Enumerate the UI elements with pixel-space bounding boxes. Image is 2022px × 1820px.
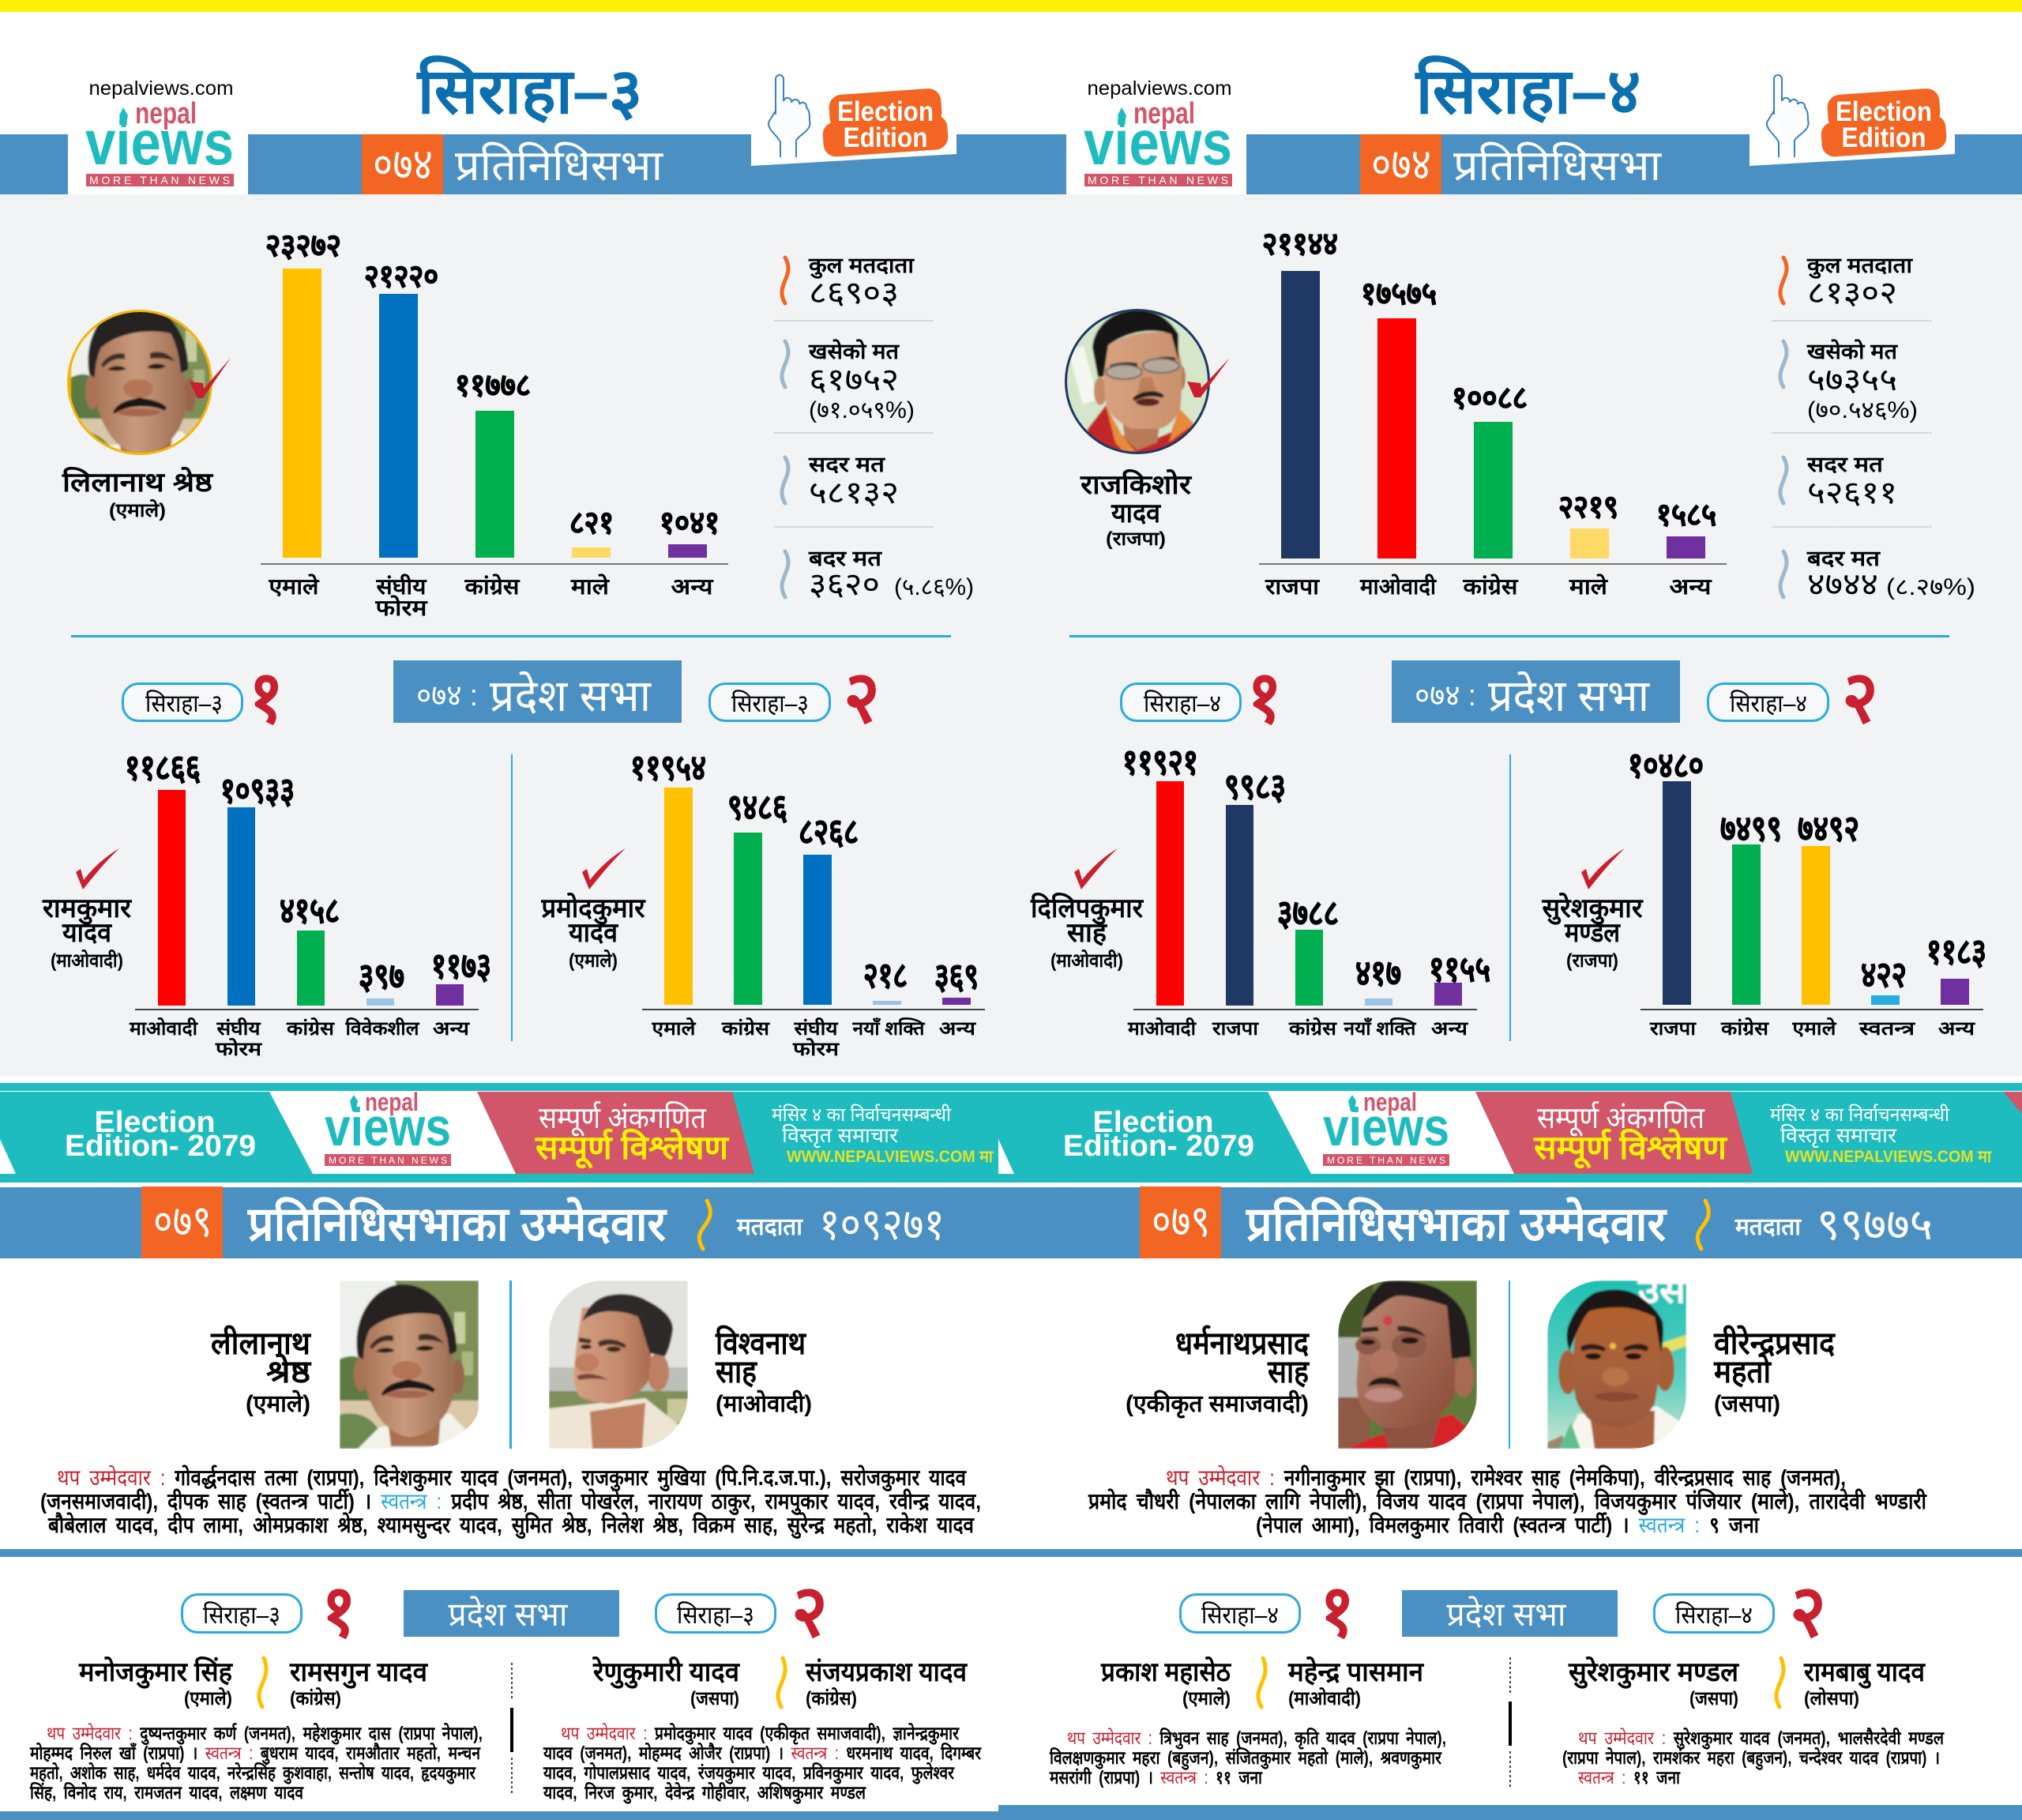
other candidates: province 2: (राप्रपा नेपाल), रामशंकर महरा (बहुजन), चन्देश्वर यादव (राप्रपा) । [1562,1747,1940,1770]
province 1 winner: साह [1066,918,1108,948]
heading band: ०७९ [153,1196,212,1246]
other candidates text: थप उम्मेदवार : गोवर्द्धनदास तत्मा (राप्रपा), दिनेशकुमार यादव (जनमत), राजकुमार मुखिया (पि.नि.द.ज.पा.), सरोजकुमार यादव [57,1465,967,1491]
heading band [1011,1186,2022,1258]
constituency 2 tag: सिराहा–३ [677,1601,754,1629]
bar chart: province 1: अन्य [1431,1018,1468,1040]
banner text: election edition: Election [95,1106,215,1139]
bar chart: province 1: ९९८३ [1224,766,1286,807]
province 2 winner: मण्डल [1564,918,1622,948]
winner name: लिलानाथ श्रेष्ठ [62,466,214,498]
banner text: website: WWW.NEPALVIEWS.COM मा [787,1148,994,1166]
vote statistics: कुल मतदाता [1806,254,1913,279]
candidate name: virendra: (जसपा) [1714,1391,1780,1417]
other candidates text: प्रमोद चौधरी (नेपालका लागि नेपाली), विजय यादव (राप्रपा नेपाल), विजयकुमार पंजियार (माले), तारादेवी भण्डारी [1088,1488,1928,1515]
banner text: election edition: Edition- 2079 [1063,1130,1254,1163]
bar chart: federal: ८२१ [569,506,614,540]
heading: pradesh sabha 074: प्रदेश सभा [490,671,652,720]
bar chart: federal: कांग्रेस [464,573,521,599]
province 1 candidates: रामसगुन यादव [289,1657,428,1689]
check mark [1187,358,1230,397]
other candidates: province 1: थप उम्मेदवार : दुष्यन्तकुमार कर्ण (जनमत), महेशकुमार दास (राप्रपा नेपाल), [47,1722,483,1746]
bar chart: province 1: ४१५८ [280,890,340,931]
banner logo [325,1088,451,1166]
logo: nepal views: MORE THAN NEWS [1088,174,1228,186]
vote statistics: ३६२० [809,567,880,602]
banner text: election edition [65,1106,256,1163]
other candidates text: (नेपाल आमा), विमलकुमार तिवारी (स्वतन्त्र पार्टी) । स्वतन्त्र : ९ जना [1256,1512,1761,1539]
bar chart: federal: १०४१ [660,506,720,540]
vote statistics: खसेको मत [1806,339,1899,363]
bar chart: federal [261,228,728,620]
bar chart: federal [1259,227,1727,599]
vote statistics: बदर मत [1806,547,1881,570]
vote statistics [774,254,974,602]
banner text: complete analysis [1533,1100,1728,1169]
vote statistics: (७०.५४६%) [1807,397,1918,423]
province 2 winner: प्रमोदकुमार [541,892,646,925]
candidate name: virendra: महतो [1713,1353,1772,1389]
election edition card: Edition [844,122,927,153]
banner text: website: मंसिर ४ का निर्वाचनसम्बन्धी [772,1104,952,1126]
banner text: election edition: Edition- 2079 [65,1130,256,1163]
banner text: election edition: Election [1093,1106,1213,1139]
bar chart: province 1: ११७३ [431,946,491,986]
bar chart: province 2: ९४८६ [727,787,787,827]
vote statistics: ६१७५२ [809,363,899,397]
vote statistics: खसेको मत [808,339,900,363]
banner logo: views [1323,1097,1449,1157]
province 2 candidates: (जसपा) [1689,1688,1738,1709]
panel: सिराहा-४ 074 results [1011,55,2022,1041]
constituency 1 tag: सिराहा–४ [1144,690,1221,717]
other candidates text: (जनसमाजवादी), दीपक साह (स्वतन्त्र पार्टी) । स्वतन्त्र : प्रदीप श्रेष्ठ, सीता पोखरेल, नारायण ठाकुर, रामपुकार यादव, रवीन्द्र यादव, [40,1488,981,1515]
bar chart: federal: संघीय [375,573,427,599]
constituency 1 tag [182,1571,356,1652]
winner name [1080,468,1192,550]
banner logo: MORE THAN NEWS [1327,1155,1445,1166]
other candidates: province 1: सिंह, विनोद राय, रामजतन यादव, लक्ष्मण यादव [29,1781,304,1803]
bar chart: federal: माले [1569,573,1608,599]
banner: election edition 2079 (left) [0,1083,2022,1183]
province 1 winner: यादव [62,918,112,948]
candidate name: dharmanath: (एकीकृत समाजवादी) [1126,1389,1309,1419]
bar chart: province 1: कांग्रेस [1288,1017,1337,1040]
logo: nepal views: nepal [1133,97,1195,130]
panel: सिराहा-३ 074 results [0,55,1011,1060]
bar chart: province 1: ३७८८ [1277,893,1339,933]
province 1 winner [42,848,132,972]
province 1 winner [1030,848,1144,972]
province 1 candidates: (एमाले) [1182,1687,1231,1709]
constituency 2 tag: २ [1790,1571,1826,1652]
logo: nepal views [1066,77,1246,194]
panel: province candidates सिराहा-३ [29,1571,982,1804]
province 2 candidates: सुरेशकुमार मण्डल [1568,1656,1740,1689]
logo: nepal views: nepalviews.com [1087,77,1232,100]
bar chart: province 2: ७४९९ [1720,808,1782,848]
winner name: (राजपा) [1106,528,1166,550]
bar chart: province 1: फोरम [215,1038,263,1060]
logo: nepal views: MORE THAN NEWS [89,174,230,186]
vote statistics: (७१.०५९%) [809,397,915,423]
other candidates: province 2: यादव, गोपालप्रसाद यादव, रंजयकुमार यादव, प्रविनकुमार यादव, फुलेश्वर [543,1762,955,1784]
orange year tag: ०७४ [1371,139,1431,189]
band title: प्रतिनिधिसभा [1453,141,1662,190]
bar chart: federal: अन्य [1670,574,1713,599]
bar chart: province 1: ११९२१ [1122,742,1198,782]
province 1 winner: (माओवादी) [1050,949,1123,972]
banner text: election edition [1063,1106,1254,1163]
heading: pradesh sabha 074: ०७४ : [416,679,478,713]
constituency 1 tag: सिराहा–३ [145,690,223,717]
candidate name: lilanath [210,1325,312,1417]
heading band: १०९२७१ [819,1199,945,1249]
heading band: मतदाता [1734,1214,1802,1240]
bar chart: province 2: संघीय [793,1017,839,1040]
candidate name: lilanath: (एमाले) [246,1389,310,1417]
candidate name: dharmanath: धर्मनाथप्रसाद [1175,1325,1310,1361]
constituency 2 tag: सिराहा–३ [731,690,809,717]
other candidates: province 1 [1049,1727,1446,1788]
province 1 winner: (माओवादी) [51,949,123,972]
bar chart: province 1: ३९७ [359,956,404,996]
candidate name: lilanath: श्रेष्ठ [266,1353,312,1389]
other candidates: province 1 [29,1722,483,1803]
bar chart: federal: २१२२० [364,259,438,294]
winner name: राजकिशोर [1080,468,1192,500]
constituency 1 tag: सिराहा–३ [203,1601,280,1629]
constituency 2 tag: सिराहा–४ [1675,1601,1753,1629]
banner text: complete analysis: सम्पूर्ण अंकगणित [1537,1100,1705,1137]
vote statistics: ८६९०३ [809,276,899,310]
bar chart: federal: ११७७८ [455,368,531,403]
bar chart: province 1: राजपा [1212,1018,1259,1040]
bar chart: federal: १७५७५ [1361,276,1437,311]
bar chart: province 1 [1122,742,1490,1040]
bar chart: federal: माओवादी [1359,573,1438,599]
logo: nepal views: nepalviews.com [88,77,234,100]
winner photo [1065,309,1210,458]
bar chart: province 2: २१८ [863,955,908,995]
panel: province candidates सिराहा-४ [1049,1571,1945,1788]
province 2 winner: (राजपा) [1566,950,1618,972]
banner logo: nepal [365,1088,419,1116]
bar chart: province 2: राजपा [1649,1018,1697,1040]
constituency 1 tag: सिराहा–४ [1201,1601,1279,1629]
district title: सिराहा–३ [415,55,643,126]
bar chart: federal: अन्य [671,574,715,599]
bar chart: federal: कांग्रेस [1462,573,1519,599]
vote statistics: ८१३०२ [1807,276,1897,310]
other candidates text [1088,1465,1928,1539]
province 1 candidates: मनोजकुमार सिंह [78,1656,234,1689]
other candidates: province 2: यादव, निरज कुमार, देवेन्द्र गोहीवार, अशिषकुमार मण्डल [543,1781,866,1804]
bar chart: federal: २३२७२ [265,228,341,263]
constituency 2 tag: २ [1842,657,1878,738]
candidate photo: lilanath [340,1280,479,1449]
heading: pradesh sabha: प्रदेश सभा [1447,1596,1567,1633]
logo: nepal views [68,77,248,194]
other candidates: province 2 [1562,1727,1945,1788]
vote statistics: सदर मत [808,453,886,476]
heading: pradesh sabha [404,1590,619,1637]
bar chart: federal: २११४४ [1262,227,1338,261]
bar chart: province 2: नयाँ शक्ति [851,1017,926,1040]
election edition card: Edition [1842,122,1926,153]
vote statistics: (५.८६%) [894,574,974,600]
constituency 2 tag: २ [791,1571,828,1652]
banner text: website: विस्तृत समाचार [1780,1123,1897,1148]
banner text: website: विस्तृत समाचार [782,1123,899,1148]
other candidates: province 2: थप उम्मेदवार : प्रमोदकुमार यादव (एकीकृत समाजवादी), ज्ञानेन्द्रकुमार [561,1722,960,1745]
heading: pradesh sabha: प्रदेश सभा [449,1596,569,1633]
banner logo: MORE THAN NEWS [329,1155,447,1166]
bar chart: province 2: फोरम [792,1038,840,1060]
bar chart: federal: १००८८ [1452,381,1528,416]
heading band: प्रतिनिधिसभाका उम्मेदवार [1246,1197,1667,1250]
province 2 candidates: (लोसपा) [1804,1687,1859,1709]
logo: nepal views: nepal [135,97,197,130]
bar chart: federal: माले [570,573,610,599]
other candidates text: थप उम्मेदवार : नगीनाकुमार झा (राप्रपा), रामेश्वर साह (नेमकिपा), वीरेन्द्रप्रसाद साह (जनमत), [1166,1465,1846,1491]
province 1 candidates: प्रकाश महासेठ [1100,1656,1231,1687]
province 2 candidates: संजयप्रकाश यादव [805,1657,968,1687]
heading band: प्रतिनिधिसभाका उम्मेदवार [247,1197,667,1250]
bar chart: province 1: कांग्रेस [286,1017,335,1040]
bar chart: province 1: माओवादी [1127,1017,1197,1040]
province 2 winner [541,848,646,972]
bar chart: province 2: ११९५४ [630,747,706,788]
vote statistics [1772,254,1975,602]
province 1 winner: रामकुमार [42,893,132,925]
candidate photo: virendra: उस [1637,1272,1688,1310]
bar chart: province 2: एमाले [651,1017,697,1040]
bar chart: province 2: अन्य [939,1018,976,1040]
other candidates: province 2: थप उम्मेदवार : सुरेशकुमार यादव (जनमत), भालसैरदेवी मण्डल [1578,1727,1945,1750]
banner logo: nepal [1363,1088,1417,1116]
province 1 candidates [78,1656,428,1709]
province 2 winner: यादव [568,918,618,948]
bar chart: province 2 [630,747,985,1060]
province 2 candidates [592,1656,968,1709]
constituency 1 tag: १ [249,657,284,738]
province 2 winner: सुरेशकुमार [1542,892,1644,925]
province 2 candidates: (कांग्रेस) [806,1687,857,1709]
panel: 079 candidates सिराहा-३ [0,1186,1011,1539]
vote statistics: (८.२७%) [1886,574,1975,600]
bar chart: federal: राजपा [1265,574,1321,599]
candidate name: dharmanath: साह [1267,1355,1310,1389]
bar chart: federal: १५८५ [1656,498,1716,532]
constituency 2 tag [1708,657,1878,738]
bar chart: province 2: ८२६८ [799,811,859,852]
other candidates: province 2: यादव (जनमत), मोहम्मद ओजैर (राप्रपा) । स्वतन्त्र : धरमनाथ यादव, दिगम्बर [543,1742,982,1763]
bar chart: province 2 [1628,745,1986,1040]
winner name: (एमाले) [109,499,166,521]
other candidates: province 1: थप उम्मेदवार : त्रिभुवन साह (जनमत), कृति यादव (राप्रपा नेपाल), [1067,1727,1446,1750]
other candidates: province 1: विलक्षणकुमार महरा (बहुजन), संजितकुमार महतो (माले), श्रवणकुमार [1049,1747,1442,1770]
province 1 winner: दिलिपकुमार [1030,892,1144,925]
bar chart: federal: फोरम [374,595,428,620]
heading: pradesh sabha 074 [393,660,682,723]
election edition card [1750,75,1955,166]
bar chart: province 2: स्वतन्त्र [1859,1018,1916,1040]
bar chart: province 2: एमाले [1791,1017,1837,1040]
vote statistics: ५७३५५ [1807,363,1897,397]
election edition card [751,75,957,166]
banner text: website [1770,1104,1992,1166]
constituency 1 tag: १ [1247,657,1282,738]
province 2 winner [1542,848,1644,972]
candidate name: bishwanath: विश्वनाथ [715,1325,806,1361]
bar chart: province 2: अन्य [1938,1018,1975,1040]
candidate name: dharmanath [1126,1325,1310,1419]
orange year tag: ०७४ [373,139,433,189]
banner text: complete analysis: सम्पूर्ण अंकगणित [539,1100,707,1137]
candidate name: virendra: वीरेन्द्रप्रसाद [1713,1325,1836,1361]
election edition card: Election [1836,96,1932,127]
other candidates: province 1: मसरांगी (राप्रपा) । स्वतन्त्र : ११ जना [1049,1766,1263,1788]
constituency 1 tag: १ [321,1571,356,1652]
bar chart: province 1: माओवादी [129,1017,198,1040]
heading band: ०७९ [1152,1196,1210,1246]
logo: nepal views: views [85,107,234,178]
panel: 079 candidates सिराहा-४ [1011,1186,2022,1539]
candidate name: lilanath: लीलानाथ [210,1325,311,1361]
candidate name: bishwanath: (माओवादी) [716,1389,812,1417]
banner text: complete analysis: सम्पूर्ण विश्लेषण [535,1128,730,1169]
province 2 candidates: (जसपा) [690,1688,739,1709]
bar chart: province 1: विवेकशील [344,1017,420,1040]
other candidates: province 1: मोहम्मद निरुल खाँ (राप्रपा) । स्वतन्त्र : बुधराम यादव, रामऔतार महतो, मन्चन [29,1742,481,1765]
province 2 candidates [1568,1656,1926,1709]
heading band: ९९७७५ [1817,1199,1933,1249]
constituency 2 tag: २ [844,657,880,738]
constituency 2 tag [709,657,880,738]
banner text: complete analysis: सम्पूर्ण विश्लेषण [1533,1128,1728,1169]
bar chart: province 2: १०४८० [1628,745,1704,785]
constituency 1 tag: १ [1320,1571,1355,1652]
banner logo: views [325,1097,451,1157]
heading: pradesh sabha [1402,1590,1618,1637]
election edition card: Election [837,96,934,127]
constituency 2 tag: सिराहा–४ [1730,690,1807,717]
candidate photo: dharmanath [1338,1280,1477,1449]
heading: pradesh sabha 074: ०७४ : [1415,679,1476,713]
other candidates: province 2: स्वतन्त्र : ११ जना [1578,1767,1681,1788]
other candidates text: बौबेलाल यादव, दीप लामा, ओमप्रकाश श्रेष्ठ, श्यामसुन्दर यादव, सुमित श्रेष्ठ, निलेश श्रेष्ठ, विक्रम साह, सुरेन्द्र महतो, राकेश यादव [47,1512,975,1539]
heading: pradesh sabha 074 [1392,660,1680,723]
banner text: website: मंसिर ४ का निर्वाचनसम्बन्धी [1770,1104,1950,1126]
banner text: website: WWW.NEPALVIEWS.COM मा [1785,1148,1992,1166]
other candidates text [40,1465,981,1539]
bar chart: province 1: ११८६६ [125,747,201,788]
province 1 candidates: महेन्द्र पासमान [1287,1656,1424,1687]
province 2 winner: (एमाले) [569,949,618,972]
province 1 candidates: (कांग्रेस) [290,1687,341,1709]
bar chart: province 1: नयाँ शक्ति [1343,1017,1417,1040]
constituency 2 tag [656,1571,828,1652]
header band [0,75,1011,194]
bar chart: province 2: ७४९२ [1798,808,1859,848]
bar chart: province 1: संघीय [216,1017,261,1040]
candidate name: bishwanath [715,1325,812,1417]
vote statistics: बदर मत [808,547,883,570]
province 1 candidates: (एमाले) [184,1687,232,1709]
winner name [62,466,214,521]
province 2 candidates: रेणुकुमारी यादव [592,1656,740,1689]
constituency 2 tag [1654,1571,1826,1652]
district title: सिराहा–४ [1414,55,1641,126]
vote statistics: ४७४४ [1807,567,1878,602]
candidate photo: virendra [1547,1272,1688,1449]
vote statistics: कुल मतदाता [808,254,915,279]
banner logo [1323,1088,1449,1166]
bar chart: province 1: ४१७ [1355,953,1401,993]
constituency 1 tag [123,657,284,738]
bar chart: province 1 [125,747,491,1060]
candidate photo: bishwanath [549,1280,688,1449]
candidate name: virendra [1713,1325,1836,1417]
vote statistics: सदर मत [1806,453,1885,476]
bar chart: province 2: ३६९ [934,956,979,996]
header band [1011,75,2022,194]
check mark [190,358,231,398]
bar chart: federal: एमाले [268,573,320,599]
province 1 candidates: (माओवादी) [1288,1687,1361,1709]
banner: election edition 2079 (right) [0,1083,2022,1183]
candidate name: bishwanath: साह [715,1355,758,1389]
band title: प्रतिनिधिसभा [455,141,663,190]
bar chart: province 2: ११८३ [1926,931,1986,972]
heading band [0,1186,1011,1258]
constituency 1 tag [1122,657,1282,738]
bar chart: province 2: कांग्रेस [721,1017,770,1040]
heading: pradesh sabha 074: प्रदेश सभा [1488,671,1650,720]
other candidates: province 1: महतो, अशोक साह, धर्मदेव यादव, नरेन्द्रसिंह कुशवाहा, सन्तोष यादव, हृदयकुमार [29,1762,476,1784]
banner text: website [772,1104,994,1166]
province 1 candidates [1100,1656,1424,1709]
winner photo [67,310,212,455]
heading band: मतदाता [736,1214,803,1240]
vote statistics: ५२६११ [1807,476,1897,510]
logo: nepal views: views [1084,107,1232,178]
constituency 1 tag [1180,1571,1355,1652]
bar chart: province 1: अन्य [433,1018,470,1040]
bar chart: province 2: कांग्रेस [1720,1017,1769,1040]
bar chart: province 2: ४२२ [1861,954,1907,995]
bar chart: province 1: ११५५ [1429,949,1490,989]
vote statistics: ५८१३२ [809,476,899,510]
bar chart: province 1: १०९३३ [220,770,295,810]
bar chart: federal: २२१९ [1558,490,1618,525]
other candidates: province 2 [543,1722,982,1804]
province 2 candidates: रामबाबु यादव [1803,1657,1926,1689]
winner name: यादव [1111,498,1161,528]
banner text: complete analysis [535,1100,730,1169]
